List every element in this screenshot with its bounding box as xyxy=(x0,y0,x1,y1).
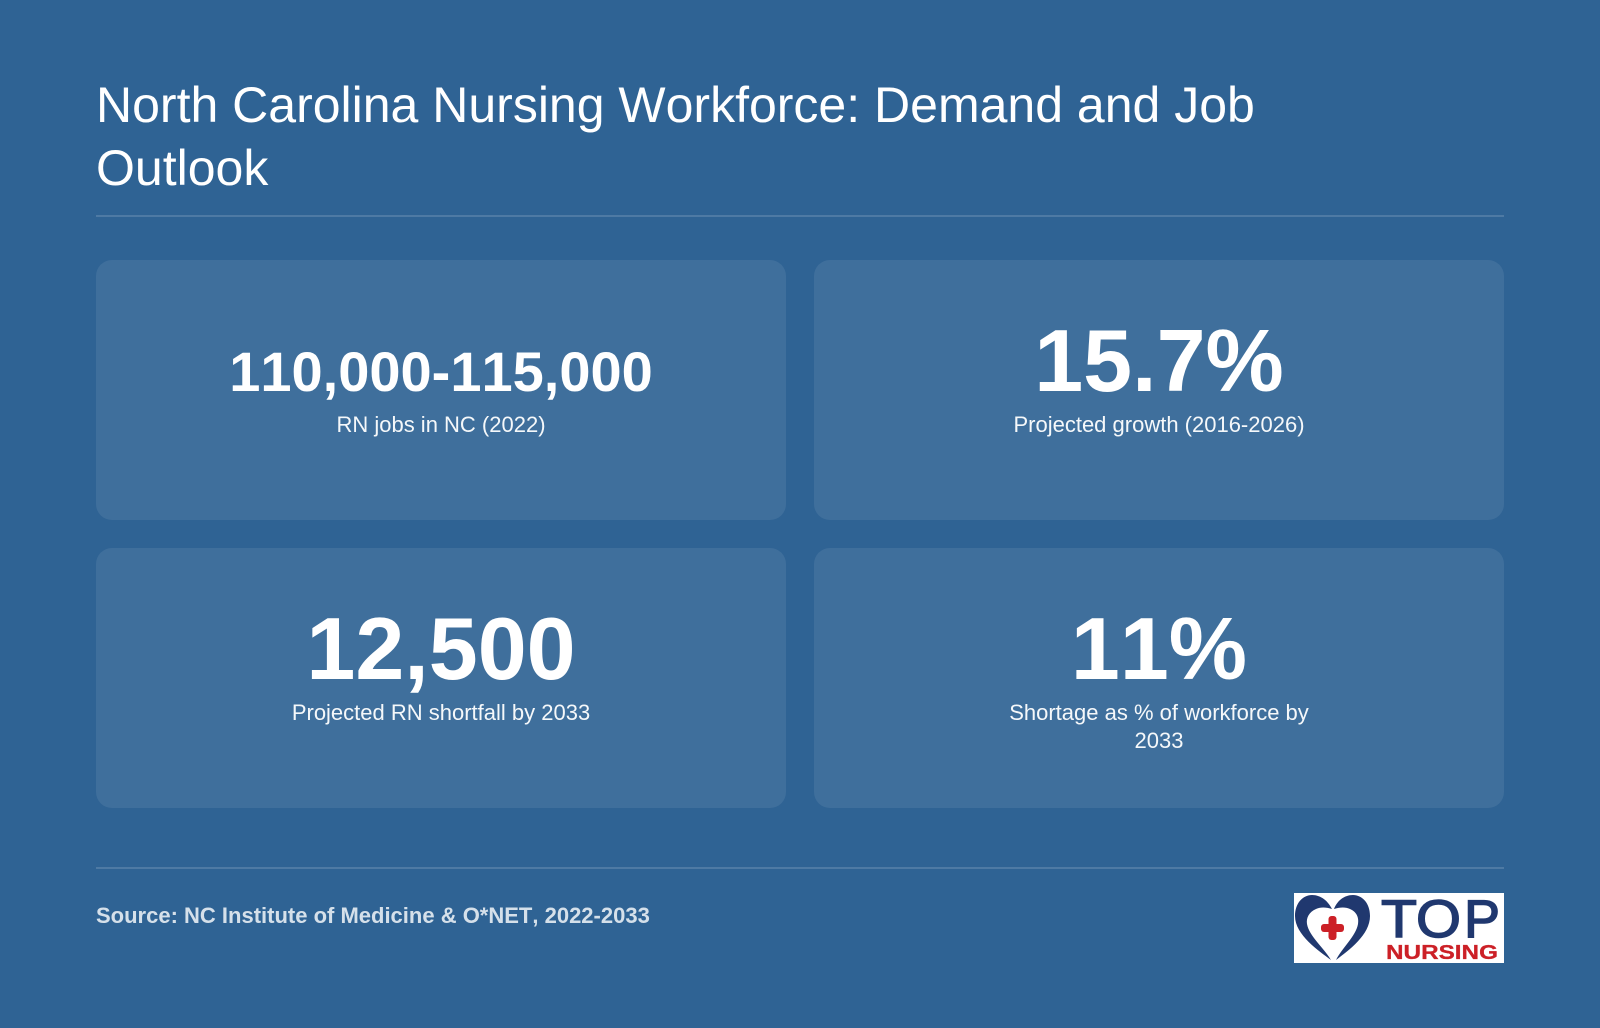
label: shortage share: Shortage as % of workforce by 2033 xyxy=(1009,700,1309,753)
stat: 15.7%: 15.7% xyxy=(1034,311,1284,410)
title: North Carolina Nursing Workforce: Demand and Job xyxy=(96,77,1255,133)
stat: 11%: 11% xyxy=(1071,599,1247,698)
label: RN jobs: RN jobs in NC (2022) xyxy=(336,412,546,437)
stat: 12,500: 12,500 xyxy=(306,599,576,698)
label: projected shortfall: Projected RN shortfall by 2033 xyxy=(292,700,590,725)
icon: heart xyxy=(1295,895,1370,960)
panel: RN jobs in NC xyxy=(96,260,786,520)
panel: projected shortfall xyxy=(96,548,786,808)
title: Outlook xyxy=(96,140,268,196)
label: projected growth: Projected growth (2016-2026) xyxy=(1013,412,1305,437)
logo wordmark: TOP xyxy=(1381,890,1500,949)
source note: Source: NC Institute of Medicine & O*NET, 2022-2033 xyxy=(96,903,650,928)
panel: shortage share xyxy=(814,548,1504,808)
logo: Top Nursing xyxy=(1294,893,1504,963)
panel: projected growth xyxy=(814,260,1504,520)
title xyxy=(96,77,1255,196)
stat: 110,000-115,000: 110,000-115,000 xyxy=(229,340,653,403)
